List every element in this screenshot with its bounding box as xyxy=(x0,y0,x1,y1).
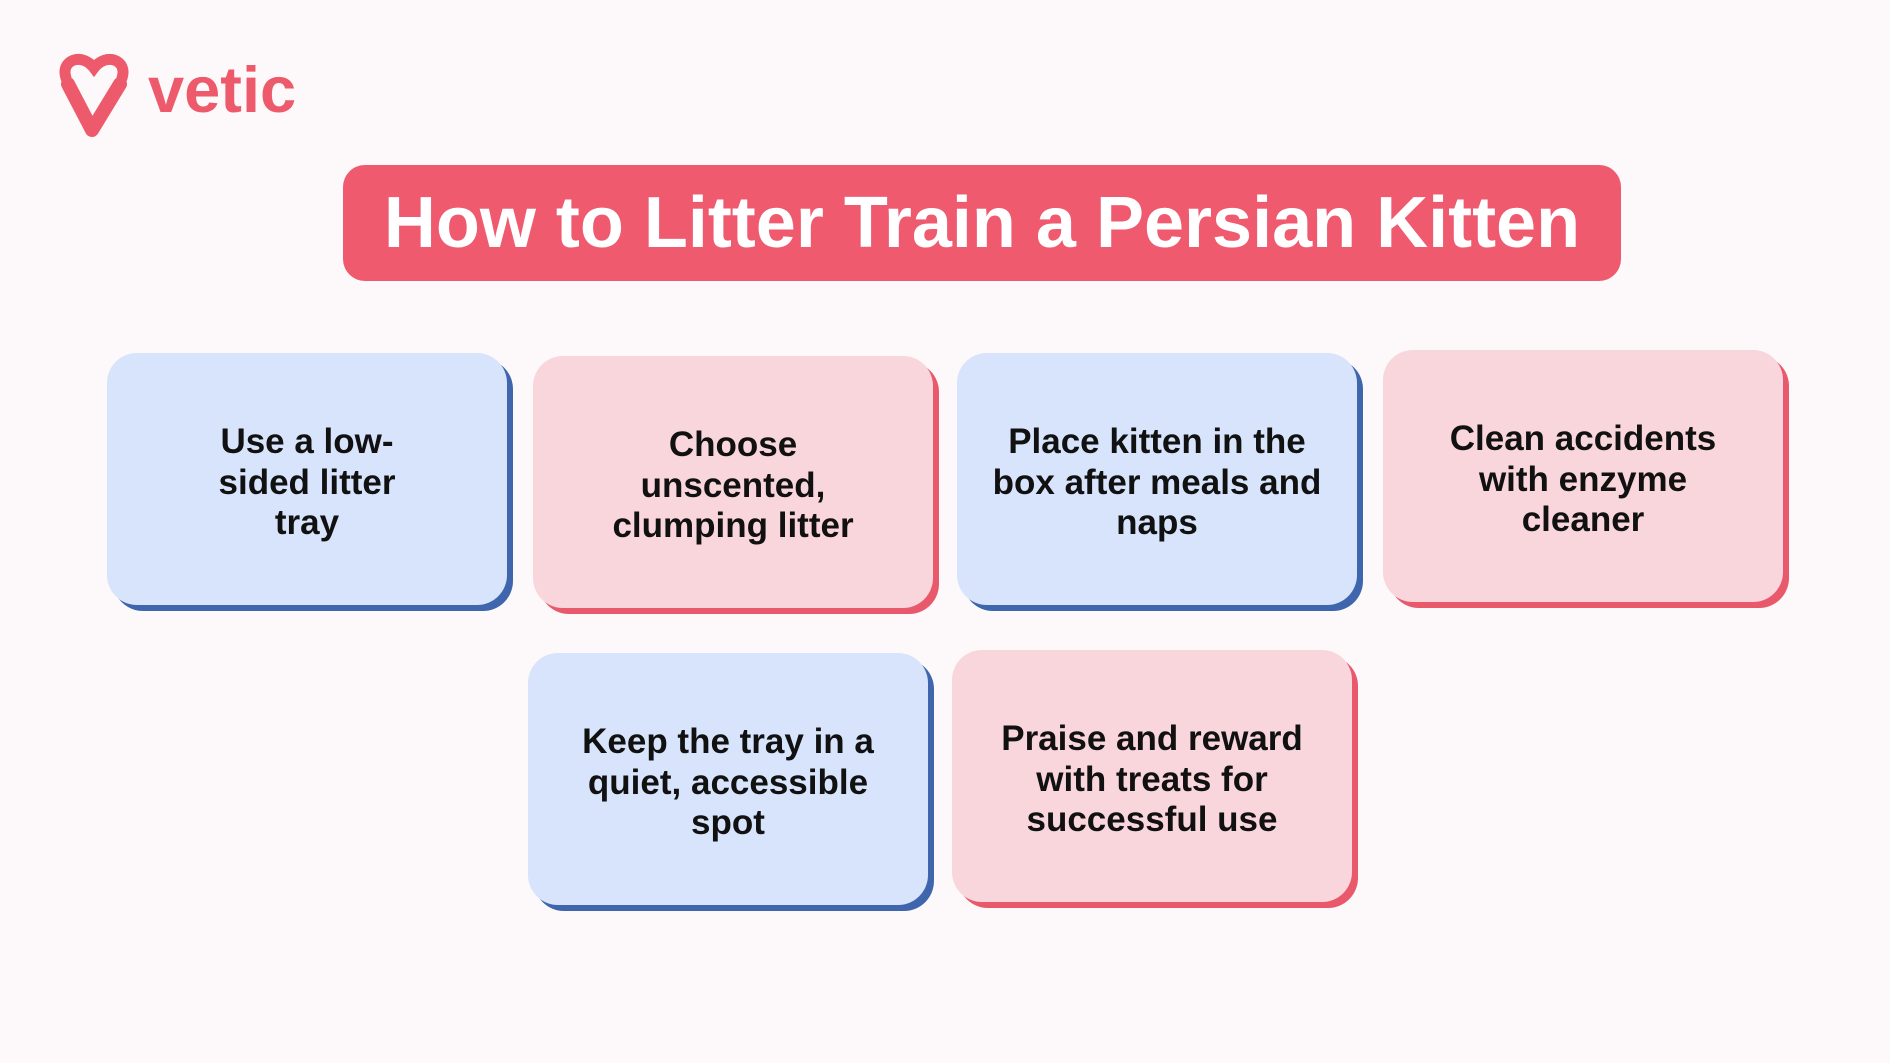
card 2 xyxy=(533,356,933,608)
card 5: spot xyxy=(691,803,765,842)
card 3: naps xyxy=(1116,503,1198,542)
icon: heart V xyxy=(59,54,129,137)
card 2: clumping litter xyxy=(612,506,854,545)
card 4: cleaner xyxy=(1522,500,1644,539)
card 5 xyxy=(528,653,928,905)
card 4: with enzyme xyxy=(1479,460,1687,499)
card 6: Praise and reward xyxy=(1001,719,1303,758)
card 1: Use a low- xyxy=(220,422,394,461)
card 3 xyxy=(957,353,1357,605)
card 5: Keep the tray in a xyxy=(582,722,874,761)
card 3: box after meals and xyxy=(993,463,1321,502)
title xyxy=(343,165,1621,281)
card 4 xyxy=(1383,350,1783,602)
card 3: Place kitten in the xyxy=(1008,422,1306,461)
card 6: successful use xyxy=(1026,800,1277,839)
card 1: tray xyxy=(275,503,339,542)
card 2: unscented, xyxy=(641,466,825,505)
logo xyxy=(59,53,296,137)
card 2: Choose xyxy=(669,425,797,464)
card 6 xyxy=(952,650,1352,902)
card 1: sided litter xyxy=(218,463,395,502)
card 4: Clean accidents xyxy=(1450,419,1716,458)
brand name: vetic xyxy=(148,53,296,126)
title: How to Litter Train a Persian Kitten xyxy=(384,183,1580,263)
card 6: with treats for xyxy=(1036,760,1268,799)
card 5: quiet, accessible xyxy=(588,763,868,802)
card 1 xyxy=(107,353,507,605)
